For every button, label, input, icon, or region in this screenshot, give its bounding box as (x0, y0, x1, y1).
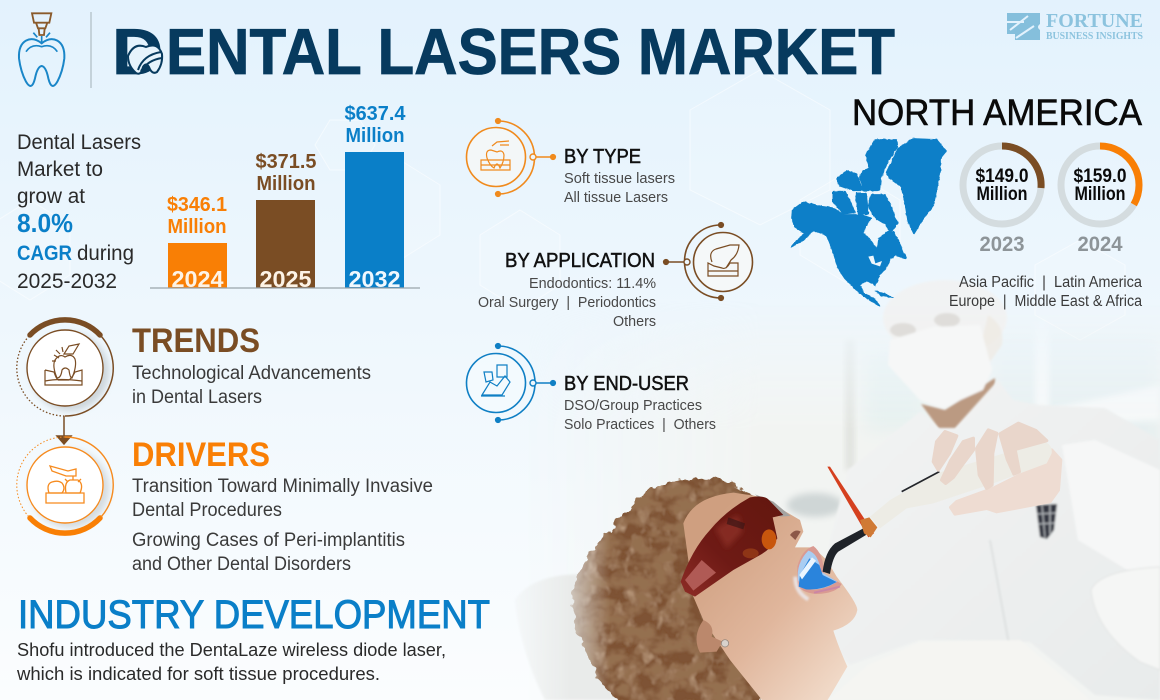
photo: dentist palm and thumb (951, 450, 1061, 514)
photo: clinic wall background (696, 342, 1160, 700)
other regions list: Asia Pacific | Latin America (959, 274, 1142, 291)
growth summary text: Dental Lasers (17, 131, 141, 154)
growth summary text: 8.0% (17, 208, 73, 238)
donut: 2024: $159.0 (1074, 166, 1126, 187)
segment: by application: Others (613, 313, 656, 330)
map: Baffin island (869, 195, 897, 232)
bar 2024: $346.1 (167, 193, 227, 216)
map: Greenland (887, 139, 946, 233)
segment: by application: BY APPLICATION (505, 250, 655, 272)
bar 2025: Million (256, 172, 316, 195)
drivers text block: Dental Procedures (132, 500, 282, 521)
segment: by type: All tissue Lasers (564, 189, 668, 206)
logo: Fortune Business Insights: BUSINESS INSIGHTS (1046, 31, 1143, 42)
industry development: Shofu introduced the DentaLaze wireless diode laser, (17, 639, 446, 660)
other regions list (949, 274, 1142, 310)
segment: by type (466, 118, 675, 206)
bar 2032: Million (346, 124, 404, 147)
title letter D with tooth emblem: D (112, 16, 163, 88)
icon: drill on teeth (46, 466, 84, 503)
bar 2024 (167, 193, 227, 292)
map: Great Lakes (868, 256, 882, 266)
bar 2025: 2025 (260, 266, 312, 292)
photo: dentist fingers (933, 423, 1047, 488)
logo: Fortune Business Insights (1007, 10, 1143, 42)
segment: by end-user: Solo Practices | Others (564, 416, 716, 433)
icon: by type ring (466, 118, 556, 197)
header divider (90, 12, 92, 88)
growth summary text: CAGR (17, 242, 72, 265)
photo: sink basin (1091, 567, 1160, 670)
industry development: INDUSTRY DEVELOPMENT (18, 593, 490, 637)
map: Caribbean islands (875, 291, 893, 298)
faint hexagon background pattern (0, 70, 1125, 340)
donut: 2023: 2023 (980, 233, 1024, 256)
photo: dentist treating patient with curing light (480, 280, 1160, 700)
growth summary text: Market to (17, 158, 103, 181)
map: Ellesmere island group (860, 140, 897, 190)
trends text block: Technological Advancements (132, 363, 371, 384)
bar 2024: 2024 (172, 266, 224, 292)
donut: 2024: 2024 (1078, 233, 1123, 256)
photo: nose shadow (790, 531, 801, 540)
photo: dentist white coat (815, 380, 1160, 700)
photo: protective goggles (681, 494, 791, 597)
growth summary text: 2025-2032 (17, 270, 117, 293)
photo: glowing mouth (795, 546, 842, 599)
photo: patient (572, 479, 857, 700)
title text: ENTAL LASERS MARKET (166, 16, 895, 88)
segment: by application (478, 222, 752, 330)
segment: by type: BY TYPE (564, 146, 641, 168)
drivers text block: DRIVERS (132, 436, 270, 474)
title (112, 16, 895, 88)
growth summary text: grow at (17, 185, 85, 208)
icon: tooth with laser (45, 344, 82, 385)
trends circle icon (17, 320, 113, 416)
growth summary text (17, 131, 141, 293)
map: mainland North America (791, 202, 906, 306)
logo: Fortune Business Insights: FORTUNE (1046, 10, 1143, 32)
segment: by application: Oral Surgery | Periodontics (478, 294, 656, 311)
segment: by end-user: BY END-USER (564, 373, 689, 395)
industry development (16, 593, 490, 684)
header icon: laser on tooth (19, 13, 64, 86)
trends text block: in Dental Lasers (132, 387, 262, 408)
map: Arctic islands (837, 171, 877, 190)
drivers text block: Growing Cases of Peri-implantitis (132, 530, 405, 551)
donut: 2023 (963, 146, 1041, 256)
bar 2032: 2032 (348, 266, 400, 292)
drivers text block: and Other Dental Disorders (132, 554, 351, 575)
map: North America (791, 139, 946, 306)
drivers text block: Transition Toward Minimally Invasive (132, 476, 433, 497)
donut: 2024 (1061, 146, 1139, 256)
bar 2032 (344, 102, 406, 292)
donut: 2024: Million (1074, 184, 1126, 205)
segment: by end-user (466, 343, 716, 433)
segment: by application: Endodontics: 11.4% (529, 275, 656, 292)
growth summary text: during (77, 242, 134, 265)
photo: patient bib (828, 640, 1090, 700)
region heading: NORTH AMERICA (852, 92, 1142, 133)
bar 2025 (256, 150, 316, 292)
donut: 2023: $149.0 (976, 166, 1028, 187)
bar 2024: Million (168, 215, 226, 238)
photo: dentist head and mask (883, 280, 1007, 430)
segment: by end-user: DSO/Group Practices (564, 397, 702, 414)
drivers text block (132, 436, 433, 575)
industry development: which is indicated for soft tissue procedures. (16, 663, 380, 684)
bar 2025: $371.5 (256, 150, 316, 173)
photo: curing light handpiece (823, 442, 1052, 574)
segment: by type: Soft tissue lasers (564, 170, 675, 187)
other regions list: Europe | Middle East & Africa (949, 293, 1142, 310)
icon: by end-user ring (466, 343, 556, 423)
photo: headrest (528, 574, 618, 700)
photo: shaded ear and earring (697, 620, 729, 653)
bar 2032: $637.4 (344, 102, 406, 125)
drivers circle icon (17, 437, 113, 533)
arrow from trends to drivers (57, 416, 71, 444)
photo: patient face and neck (683, 493, 857, 700)
trends text block: TRENDS (132, 322, 260, 360)
icon: by application ring (663, 222, 752, 301)
bar chart: market size (150, 102, 420, 292)
trends text block (132, 322, 371, 408)
photo: patient hair (572, 479, 760, 700)
donut: 2023: Million (976, 184, 1028, 205)
